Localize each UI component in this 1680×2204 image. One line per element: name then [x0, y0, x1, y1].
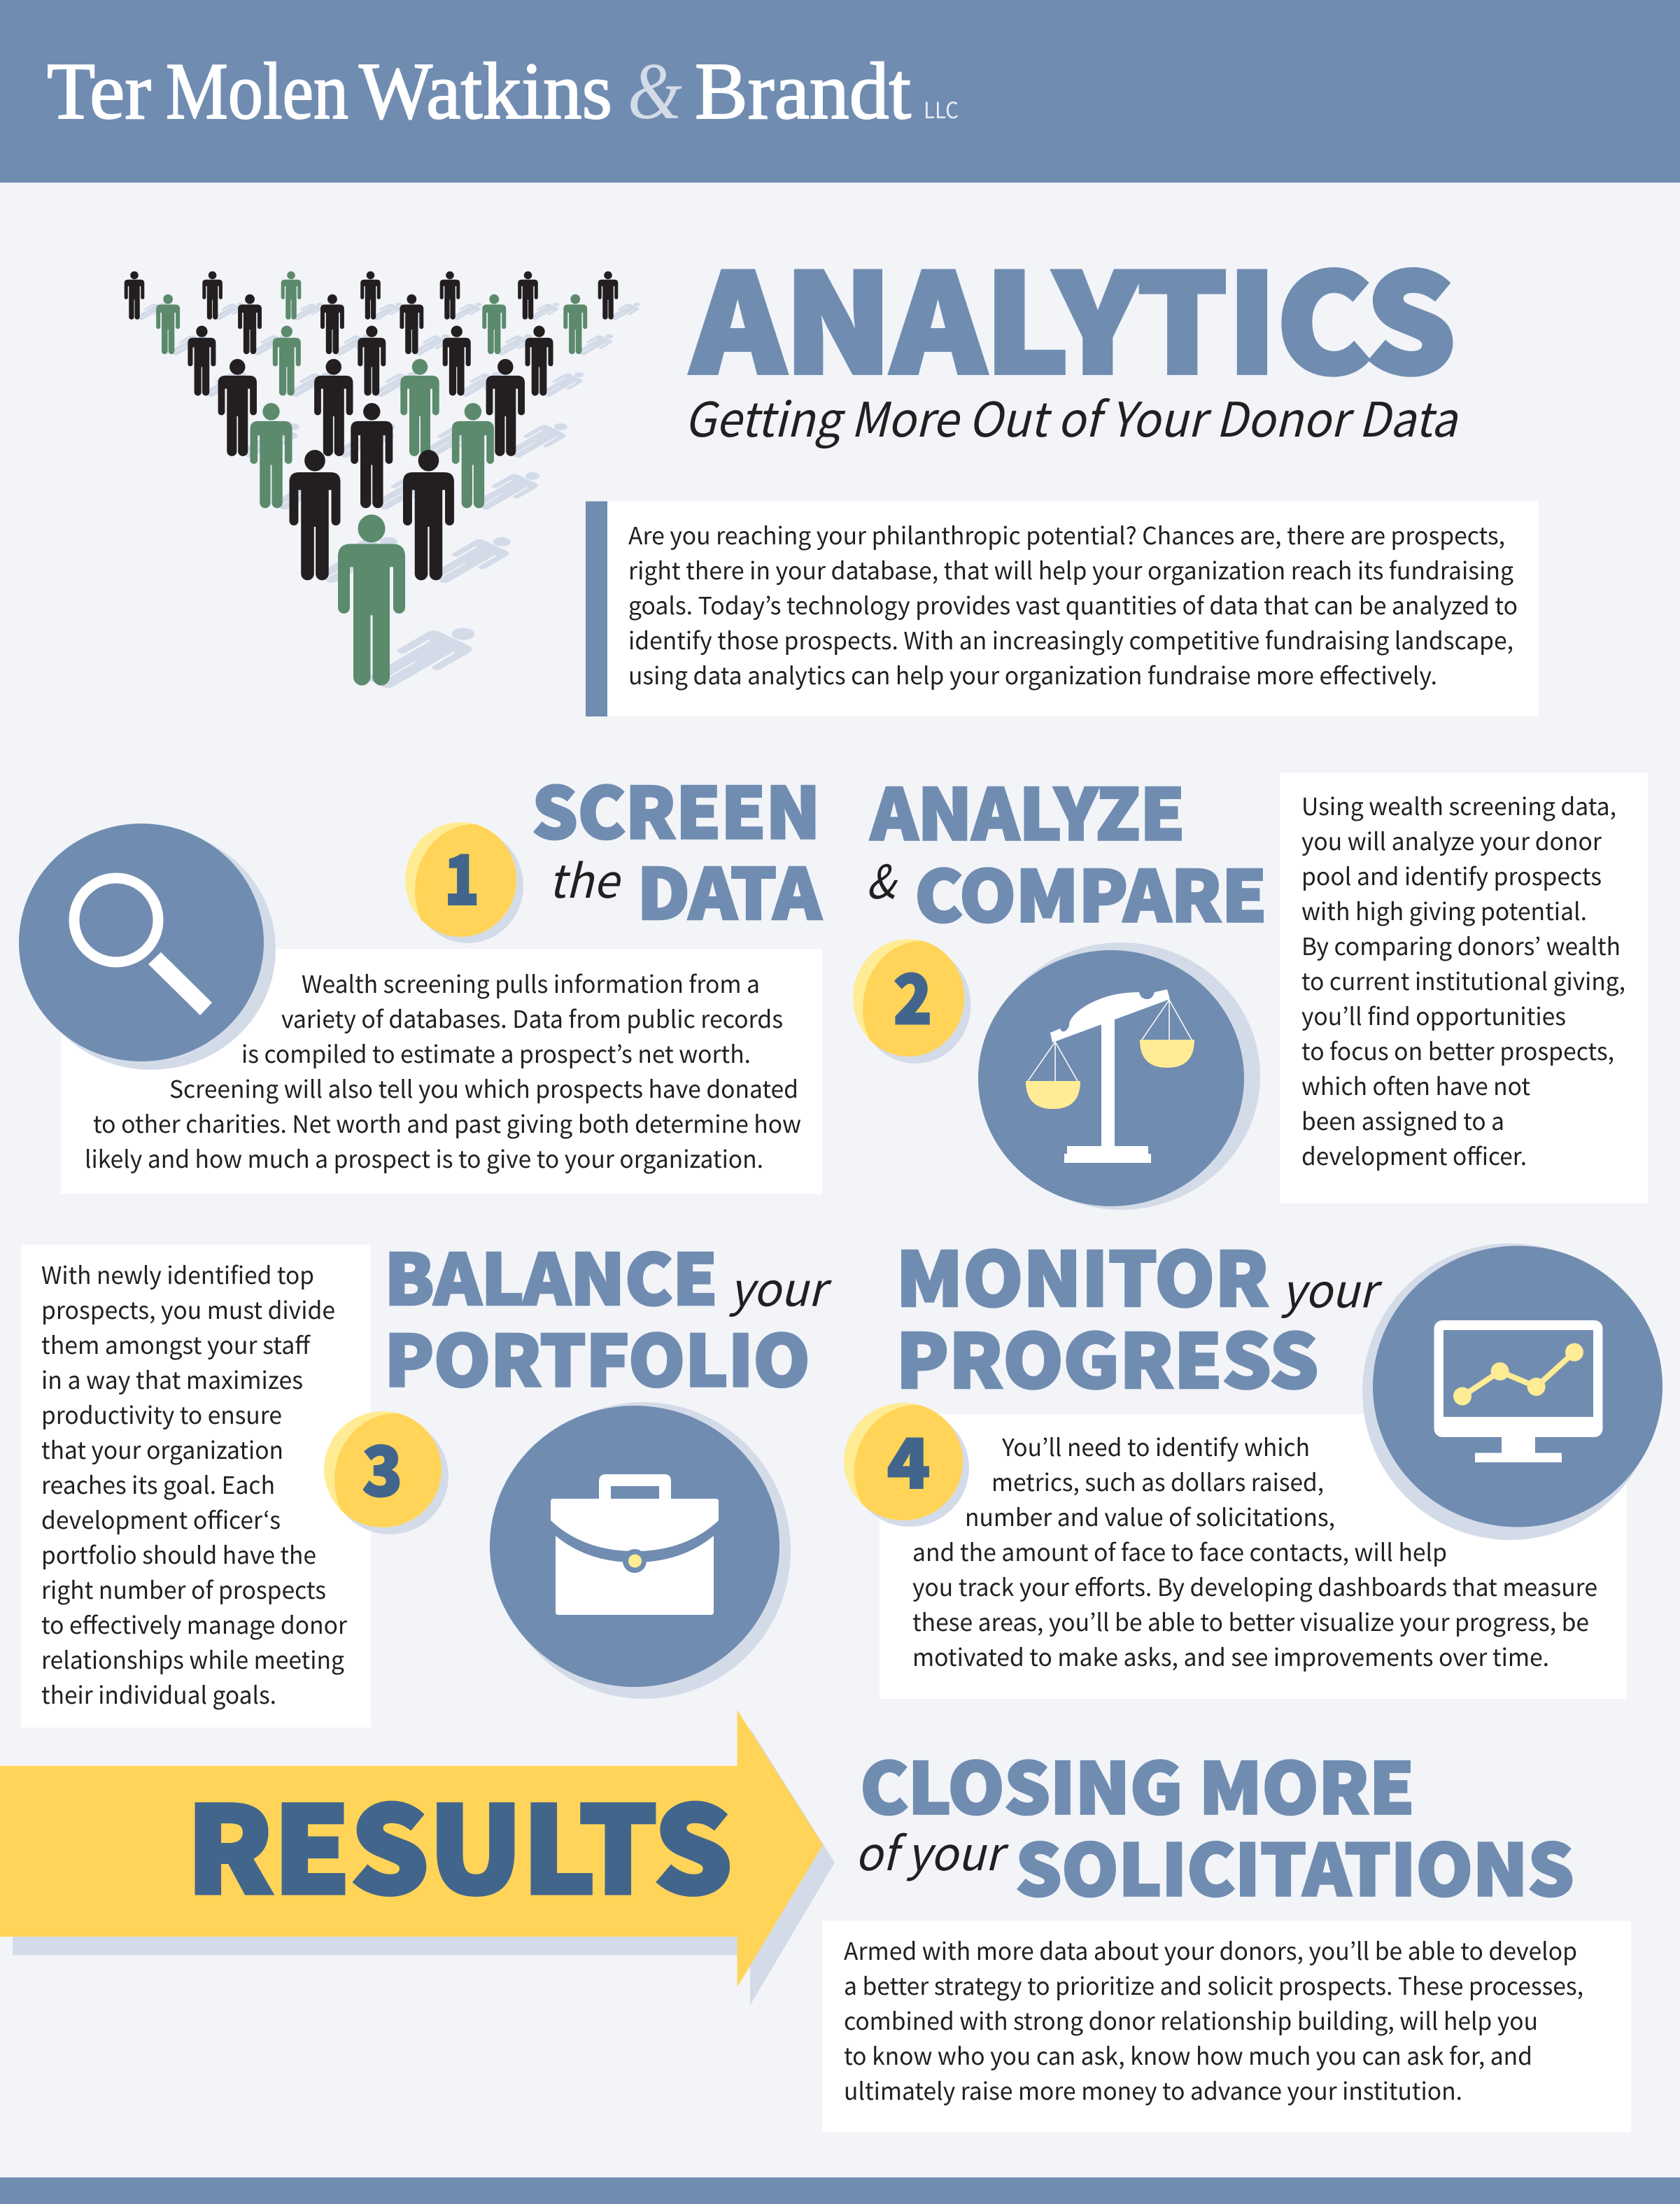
panel: results text box: Armed with more data about your donors, you’ll be able to develop [844, 1933, 1577, 1967]
panel: step 3 text box: that your organization [41, 1432, 283, 1466]
heading: ANALYZE & COMPARE: & [866, 845, 898, 912]
heading: ANALYZE & COMPARE: COMPARE [915, 840, 1266, 942]
logo: Ter Molen Watkins & Brandt LLC: LLC [924, 93, 959, 125]
intro text: identify those prospects. With an increasingly competitive fundraising landscape, [628, 622, 1513, 656]
logo: Ter Molen Watkins & Brandt LLC: Watkins [359, 47, 612, 136]
logo: Ter Molen Watkins & Brandt LLC [47, 47, 959, 136]
icon: magnifying glass [19, 824, 276, 1070]
panel: results text box: combined with strong donor relationship building, will help you [844, 2002, 1538, 2037]
figure shadows [132, 300, 645, 694]
heading: CLOSING MORE of your SOLICITATIONS: of your [855, 1817, 1009, 1884]
badge: number 3: 3 [362, 1416, 402, 1516]
panel: step 4 text box: You’ll need to identify which [1001, 1429, 1310, 1463]
header band [0, 0, 1680, 183]
lead figure [338, 514, 405, 686]
heading: ANALYZE & COMPARE [866, 758, 1266, 942]
arrow shadow [13, 1728, 835, 2005]
heading: MONITOR your PROGRESS: MONITOR [896, 1220, 1269, 1328]
panel: step 4 text box: and the amount of face to face contacts, will help [912, 1534, 1447, 1568]
panel: step 2 text box [1280, 772, 1648, 1203]
panel: step 4 text box: motivated to make asks, and see improvements over time. [912, 1639, 1549, 1673]
heading: SCREEN the DATA [532, 757, 822, 939]
heading: MONITOR your PROGRESS: your [1280, 1254, 1383, 1321]
heading: BALANCE your PORTFOLIO: BALANCE [385, 1224, 718, 1325]
heading: SCREEN the DATA: the [549, 845, 622, 912]
panel: step 3 text box: relationships while meeting [41, 1641, 344, 1676]
panel: step 4 text box: metrics, such as dollars raised, [991, 1464, 1324, 1498]
panel: step 4 text box: number and value of solicitations, [965, 1499, 1335, 1533]
panel: step 3 text box: development officer‘s [41, 1502, 281, 1536]
panel: step 3 text box: to effectively manage donor [41, 1606, 348, 1641]
icon: balance scale [978, 942, 1260, 1210]
badge: number 4: 4 [887, 1409, 930, 1507]
panel: step 3 text box: With newly identified top [41, 1257, 314, 1291]
panel: results text box [822, 1921, 1631, 2133]
heading: BALANCE your PORTFOLIO [385, 1224, 832, 1406]
panel: step 3 text box: reaches its goal. Each [41, 1467, 275, 1501]
panel: step 1 text box: is compiled to estimate a prospect’s net worth. [241, 1036, 751, 1070]
panel: step 4 text box: you track your efforts. By developing dashboards that measure [912, 1569, 1597, 1603]
badge: number 2: 2 [894, 945, 932, 1043]
panel: step 2 text box: which often have not [1301, 1068, 1530, 1102]
heading: BALANCE your PORTFOLIO: PORTFOLIO [385, 1305, 810, 1406]
heading: BALANCE your PORTFOLIO: your [728, 1252, 832, 1320]
arrow: results [0, 1710, 823, 1987]
heading: CLOSING MORE of your SOLICITATIONS: CLOSING MORE [861, 1732, 1415, 1834]
panel: results text box: ultimately raise more money to advance your institution. [844, 2072, 1462, 2107]
panel: step 2 text box: to focus on better prospects, [1301, 1033, 1614, 1067]
panel: step 2 text box: Using wealth screening data, [1301, 788, 1616, 822]
intro text: Are you reaching your philanthropic potential? Chances are, there are prospects, [628, 517, 1505, 551]
panel: step 1 text box: to other charities. Net worth and past giving both determine how [93, 1105, 801, 1140]
panel: step 1 text box: likely and how much a prospect is to give to your organization. [85, 1140, 763, 1175]
figures row 2 [156, 295, 587, 354]
panel: step 2 text box: to current institutional giving, [1301, 963, 1625, 997]
badge: number 4 [844, 1403, 969, 1527]
logo: Ter Molen Watkins & Brandt LLC: Ter [47, 47, 151, 136]
icon: monitor with line chart [1362, 1243, 1663, 1540]
figures row 6 [290, 450, 454, 580]
panel: results text box: to know who you can ask, know how much you can ask for, and [844, 2037, 1532, 2072]
footer band [0, 2177, 1680, 2204]
subtitle: Getting More Out of Your Donor Data [684, 381, 1459, 451]
panel: step 1 text box [61, 949, 822, 1194]
panel: step 1 text box: Screening will also tell you which prospects have donated [169, 1071, 798, 1105]
panel: step 2 text box: By comparing donors’ wealth [1301, 928, 1621, 962]
people illustration [125, 271, 645, 694]
heading: SCREEN the DATA: DATA [637, 838, 822, 939]
intro text [628, 517, 1518, 691]
heading: RESULTS: RESULTS [187, 1755, 733, 1927]
badge: number 2 [853, 939, 971, 1064]
panel: step 3 text box: them amongst your staff [41, 1327, 311, 1361]
icon: briefcase [490, 1402, 791, 1699]
heading: CLOSING MORE of your SOLICITATIONS [855, 1732, 1574, 1916]
panel: step 3 text box: prospects, you must divide [41, 1292, 335, 1326]
logo: Ter Molen Watkins & Brandt LLC: Brandt [695, 47, 911, 136]
heading: MONITOR your PROGRESS: PROGRESS [896, 1301, 1318, 1409]
heading: SCREEN the DATA: SCREEN [532, 757, 820, 859]
panel: step 4 text box: these areas, you’ll be able to better visualize your progress, be [912, 1604, 1589, 1638]
intro text: goals. Today’s technology provides vast quantities of data that can be analyzed to [628, 587, 1518, 621]
panel: step 3 text box: their individual goals. [41, 1676, 276, 1711]
logo: Ter Molen Watkins & Brandt LLC: Molen [166, 47, 348, 136]
badge: number 3 [324, 1411, 449, 1534]
panel: step 2 text box: been assigned to a [1301, 1103, 1504, 1137]
panel: step 2 text box: with high giving potential. [1301, 893, 1587, 927]
panel: step 3 text box: right number of prospects [41, 1571, 326, 1606]
title: ANALYTICS: ANALYTICS [690, 216, 1455, 411]
panel: step 1 text box: variety of databases. Data from public records [281, 1001, 783, 1035]
panel: step 4 text box [880, 1414, 1627, 1699]
panel: step 2 text box: you’ll find opportunities [1301, 998, 1566, 1032]
heading: MONITOR your PROGRESS [896, 1220, 1383, 1409]
panel: step 2 text box: pool and identify prospects [1301, 858, 1602, 892]
badge: number 1 [405, 822, 523, 943]
logo: Ter Molen Watkins & Brandt LLC: & [628, 47, 682, 136]
figures row 3 [188, 326, 553, 396]
figures row 5 [250, 403, 494, 508]
panel: results text box: a better strategy to prioritize and solicit prospects. These processes, [844, 1968, 1583, 2002]
badge: number 1: 1 [444, 826, 479, 924]
heading: ANALYZE & COMPARE: ANALYZE [870, 758, 1185, 860]
panel: step 3 text box: in a way that maximizes [41, 1362, 303, 1396]
intro text: using data analytics can help your organization fundraise more effectively. [628, 657, 1437, 691]
figures row 1 [125, 271, 618, 320]
panel: step 2 text box: development officer. [1301, 1138, 1527, 1172]
panel: step 1 text box: Wealth screening pulls information from a [302, 966, 760, 1000]
panel: step 3 text box [21, 1245, 371, 1728]
panel: step 3 text box: portfolio should have the [41, 1537, 316, 1571]
heading: CLOSING MORE of your SOLICITATIONS: SOLICITATIONS [1016, 1814, 1574, 1916]
intro text: right there in your database, that will help your organization reach its fundraising [628, 552, 1513, 586]
panel: step 2 text box: you will analyze your donor [1301, 823, 1602, 857]
figures row 4 [218, 359, 525, 456]
panel: step 3 text box: productivity to ensure [41, 1397, 282, 1431]
panel: intro [586, 501, 1538, 716]
